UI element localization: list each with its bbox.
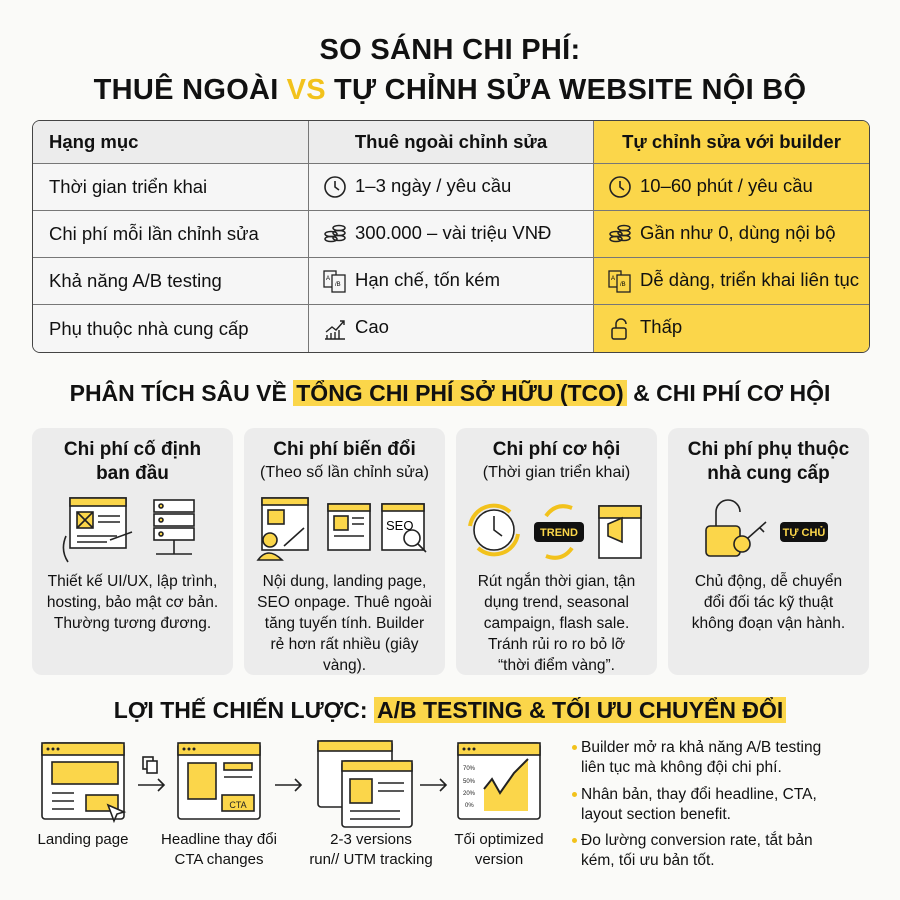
- flow labels: [38, 831, 544, 868]
- flow labels: Headline thay đổi: [161, 831, 277, 848]
- flow diagram: 50%: [463, 779, 476, 785]
- comparison table: Cao: [355, 316, 389, 337]
- bullet list: Builder mở ra khả năng A/B testing: [581, 739, 821, 756]
- title: [94, 34, 806, 106]
- card: vendor dependency: đổi đối tác kỹ thuật: [704, 594, 833, 611]
- comparison table: Gần như 0, dùng nội bộ: [640, 222, 835, 243]
- flow labels: Tối optimized: [454, 831, 544, 848]
- card: vendor dependency: [668, 428, 869, 675]
- card: vendor dependency: Chủ động, dễ chuyển: [695, 573, 842, 590]
- icon: lock key tự chủ: TỰ CHỦ: [783, 526, 825, 539]
- comparison table: Hạn chế, tốn kém: [355, 269, 500, 290]
- card: opportunity cost: dụng trend, seasonal: [484, 594, 629, 611]
- flow diagram: 0%: [465, 803, 474, 809]
- heading: TCO analysis: PHÂN TÍCH SÂU VỀ TỔNG CHI PHÍ SỞ HỮU (TCO) & CHI PHÍ CƠ HỘI: [70, 380, 830, 406]
- card: opportunity cost: Tránh rủi ro ro bỏ lỡ: [488, 636, 625, 653]
- comparison table: Tự chỉnh sửa với builder: [622, 131, 841, 152]
- comparison table: A: [326, 276, 330, 282]
- card: fixed cost: Thiết kế UI/UX, lập trình,: [48, 573, 217, 590]
- card: vendor dependency: nhà cung cấp: [707, 463, 830, 484]
- comparison table: /B: [335, 282, 341, 288]
- comparison table: Thời gian triển khai: [49, 176, 207, 197]
- title: THUÊ NGOÀI VS TỰ CHỈNH SỬA WEBSITE NỘI BỘ: [94, 74, 806, 106]
- flow labels: version: [475, 851, 523, 868]
- card: fixed cost: ban đầu: [96, 463, 169, 484]
- comparison table: Dễ dàng, triển khai liên tục: [640, 269, 859, 290]
- bullet list: layout section benefit.: [581, 806, 731, 823]
- card: fixed cost: Chi phí cố định: [64, 439, 201, 460]
- card: variable cost: (Theo số lần chỉnh sửa): [260, 464, 429, 481]
- flow labels: Landing page: [38, 831, 128, 848]
- card: variable cost: Nội dung, landing page,: [263, 573, 426, 590]
- card: opportunity cost: [456, 428, 657, 675]
- flow diagram: 70%: [463, 766, 476, 772]
- icon: lock key tự chủ: [705, 499, 828, 557]
- card: fixed cost: Thường tương đương.: [54, 615, 211, 632]
- card: variable cost: tăng tuyến tính. Builder: [265, 615, 424, 632]
- bullet list: Nhân bản, thay đổi headline, CTA,: [581, 786, 817, 803]
- bullet list: Đo lường conversion rate, tắt bản: [581, 832, 813, 849]
- comparison table: 10–60 phút / yêu cầu: [640, 175, 813, 196]
- icon: design and server: [62, 497, 195, 562]
- card: vendor dependency: Chi phí phụ thuộc: [688, 439, 849, 460]
- card: opportunity cost: Chi phí cơ hội: [493, 439, 620, 460]
- card: opportunity cost: campaign, flash sale.: [484, 615, 629, 632]
- comparison table: 300.000 – vài triệu VNĐ: [355, 222, 551, 243]
- flow diagram: 20%: [463, 791, 476, 797]
- comparison table: Khả năng A/B testing: [49, 270, 222, 291]
- card: fixed cost: [32, 428, 233, 675]
- card: fixed cost: hosting, bảo mật cơ bản.: [47, 594, 218, 611]
- bullet list: liên tục mà không đội chi phí.: [581, 759, 782, 776]
- card: variable cost: SEO onpage. Thuê ngoài: [257, 594, 432, 611]
- card: opportunity cost: (Thời gian triển khai): [483, 464, 630, 481]
- flow diagram: CTA: [229, 800, 247, 810]
- comparison table: Hạng mục: [49, 131, 138, 152]
- comparison table: Phụ thuộc nhà cung cấp: [49, 318, 249, 338]
- card: variable cost: rẻ hơn rất nhiều (giây: [270, 636, 419, 653]
- comparison table: [32, 120, 870, 353]
- card: opportunity cost: “thời điểm vàng”.: [498, 657, 615, 674]
- flow labels: run// UTM tracking: [309, 851, 433, 868]
- card: vendor dependency: không đoạn vận hành.: [692, 615, 845, 632]
- icon: editing pages: [256, 497, 426, 561]
- card: variable cost: [244, 428, 445, 675]
- bullet list: [572, 739, 821, 869]
- comparison table: Thấp: [640, 316, 682, 337]
- comparison table: 1–3 ngày / yêu cầu: [355, 175, 511, 196]
- bullet list: kém, tối ưu bản tốt.: [581, 852, 715, 869]
- comparison table: Chi phí mỗi lần chỉnh sửa: [49, 223, 259, 244]
- card: variable cost: vàng).: [323, 657, 366, 674]
- comparison table: A: [611, 276, 615, 282]
- flow diagram: [41, 740, 541, 828]
- icon: clock trend calendar: [468, 504, 642, 560]
- flow labels: 2-3 versions: [330, 831, 412, 848]
- icon: clock trend calendar: TREND: [540, 527, 578, 539]
- card: variable cost: Chi phí biến đổi: [273, 439, 416, 460]
- title: SO SÁNH CHI PHÍ:: [320, 34, 580, 66]
- comparison table: Thuê ngoài chỉnh sửa: [355, 131, 547, 152]
- icon: editing pages: SEO: [386, 518, 413, 533]
- card: opportunity cost: Rút ngắn thời gian, tận: [478, 573, 635, 590]
- comparison table: /B: [620, 282, 626, 288]
- flow labels: CTA changes: [175, 851, 263, 868]
- heading: A/B testing: LỢI THẾ CHIẾN LƯỢC: A/B TESTING & TỐI ƯU CHUYỂN ĐỔI: [114, 697, 783, 723]
